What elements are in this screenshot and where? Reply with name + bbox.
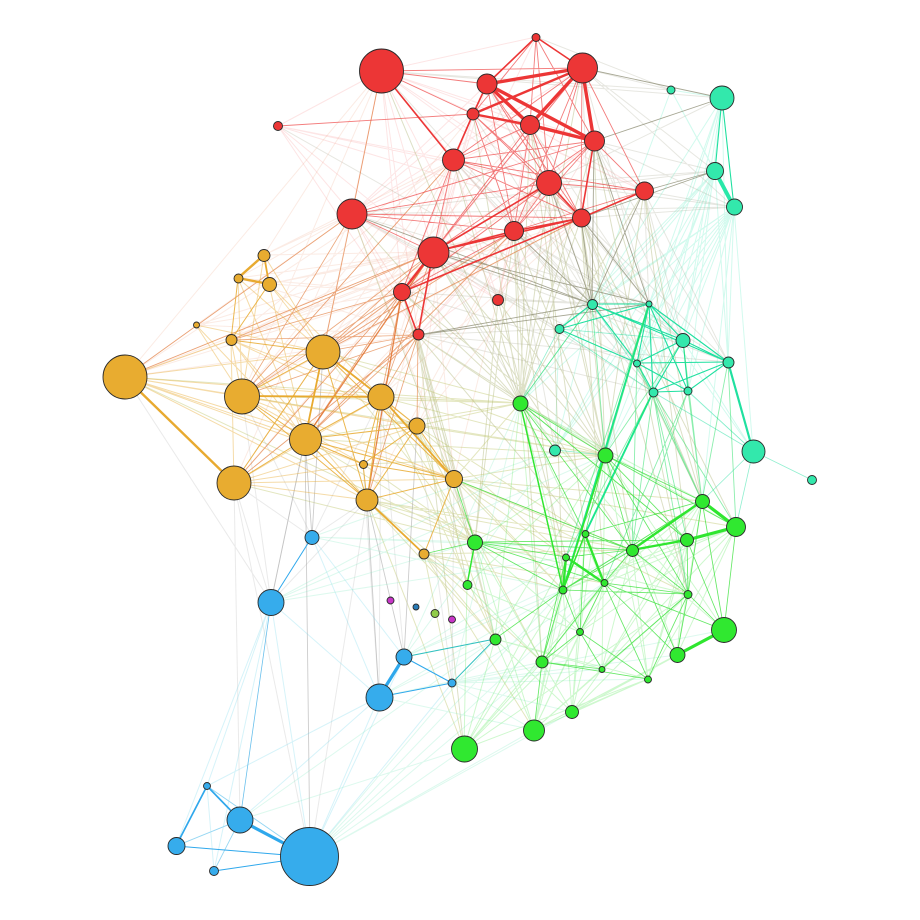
nodes: green cluster [452, 396, 746, 762]
nodes: blue cluster [168, 530, 456, 886]
edges: faint red fans [103, 34, 816, 886]
nodes: teal cluster [550, 86, 816, 484]
nodes: red cluster [274, 34, 654, 340]
edge: thick teal pair [715, 171, 734, 207]
edges: faint green [464, 403, 736, 749]
edges: faint blue and grey lower region [125, 352, 454, 857]
edges: faint orange to green [125, 352, 736, 749]
edges: faint teal fans [520, 90, 753, 501]
edges: red medium [278, 37, 644, 335]
edges: orange network [125, 255, 454, 500]
edges: red thick [487, 68, 594, 141]
nodes: orange cluster [103, 250, 462, 559]
edges: blue network [176, 537, 452, 871]
edges: green network [424, 403, 736, 730]
edges: orange-red mix [125, 71, 581, 500]
edges: grey red-to-teal [352, 68, 722, 335]
nodes: isolated small nodes [387, 597, 456, 623]
edges: faint orange-red [125, 71, 581, 500]
edges: teal network [559, 98, 734, 392]
edges: olive red-to-green [352, 68, 736, 749]
